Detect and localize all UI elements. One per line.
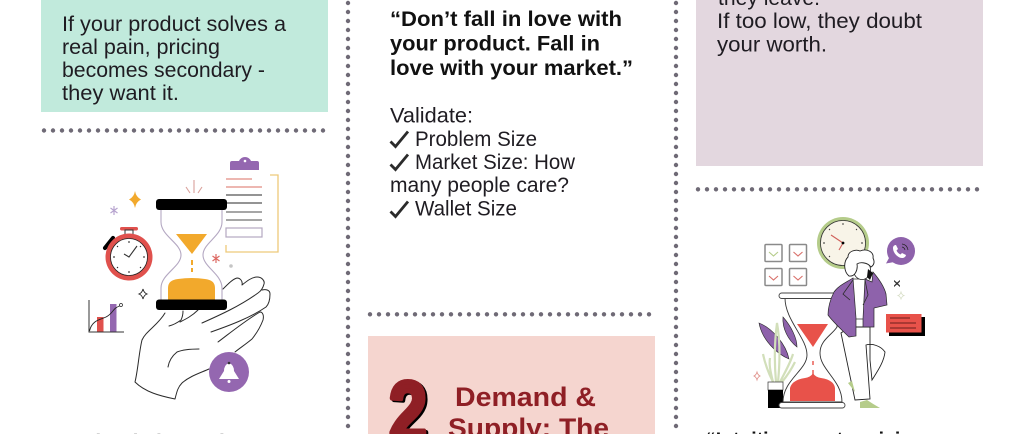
text: validation checklist: Validate: xyxy=(390,104,473,128)
illustration: hourglass on open hand xyxy=(89,157,278,399)
text: product pain: real pain, pricing xyxy=(62,36,220,59)
chart: small bars and curve xyxy=(89,300,124,332)
text: validation checklist: Market Size: How xyxy=(415,151,576,174)
icon: red note card xyxy=(886,314,925,336)
text: price doubt: your worth. xyxy=(717,34,827,56)
icon: phone bubble xyxy=(886,237,915,265)
panel: green pain callout xyxy=(41,0,328,112)
icon: wall clock xyxy=(817,217,869,269)
heading: demand and supply xyxy=(448,382,609,434)
text: market quote: love with your market.” xyxy=(390,57,633,80)
icon: bell badge xyxy=(209,352,249,392)
panel: mauve pricing callout xyxy=(696,0,983,166)
panel: demand and supply header xyxy=(368,336,655,434)
icon: checkbox grid xyxy=(765,244,806,286)
icon: person on phone xyxy=(828,250,887,408)
text: validation checklist: many people care? xyxy=(390,174,569,197)
text: product pain: they want it. xyxy=(62,82,179,105)
text: price doubt: If too low, they doubt xyxy=(717,10,922,33)
icon: stopwatch xyxy=(105,227,152,280)
text: market quote: “Don’t fall in love with xyxy=(390,8,622,31)
text: product pain: becomes secondary - xyxy=(62,59,265,82)
icon: plant xyxy=(754,317,797,408)
text: market quote xyxy=(390,8,633,80)
text: validation checklist xyxy=(390,104,576,220)
icon: hand xyxy=(135,277,270,399)
text: product pain: If your product solves a xyxy=(62,13,286,36)
text: validation checklist: Wallet Size xyxy=(415,198,517,220)
icon: small sparkles xyxy=(894,280,904,299)
text: product pain xyxy=(62,13,286,105)
icon: hourglass xyxy=(156,180,227,310)
heading: demand and supply: Demand & xyxy=(455,382,596,412)
illustration: person on phone beside hourglass xyxy=(754,217,925,408)
icon: clipboard xyxy=(226,157,278,252)
text: price doubt xyxy=(717,0,922,56)
text: market quote: your product. Fall in xyxy=(390,32,600,56)
icon: sparkles xyxy=(110,191,233,299)
text: validation checklist: Problem Size xyxy=(415,128,537,151)
icon: large hourglass xyxy=(779,293,845,408)
